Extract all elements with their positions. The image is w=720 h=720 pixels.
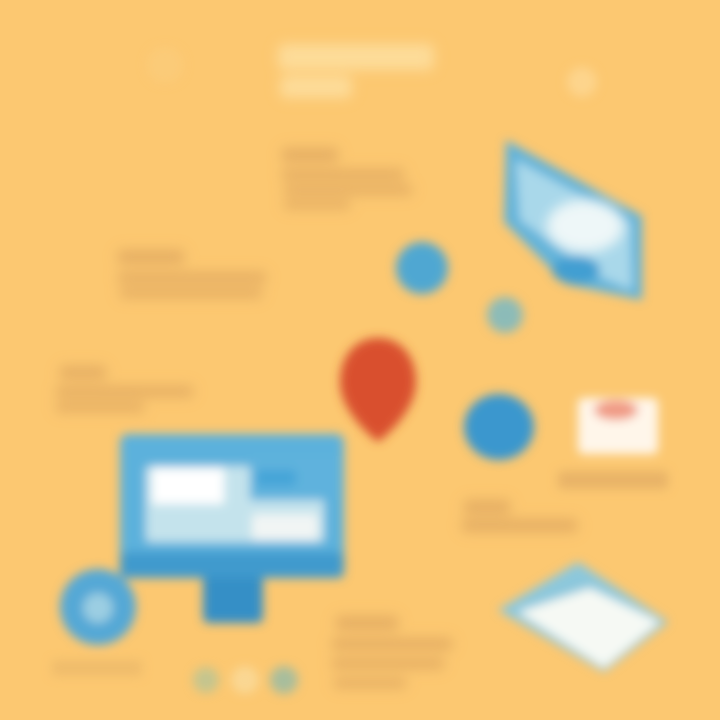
text block: lower centre right (462, 500, 577, 532)
icon: red map pin (340, 338, 416, 442)
text block: under badge (52, 660, 142, 676)
title block (278, 44, 434, 98)
icon: desktop monitor (120, 434, 344, 623)
text block: under envelope (558, 471, 668, 489)
icon: tilted tablet bottom right (498, 562, 668, 672)
icon: top right faint mark (567, 67, 597, 97)
text block: lower left (56, 366, 193, 412)
icon: small teal dot (487, 297, 523, 333)
blurred artwork (52, 44, 668, 694)
icon: blue globe (464, 394, 534, 460)
icons: three small dots (193, 666, 298, 694)
text block: middle left (118, 250, 266, 298)
icon: top left faint mark (147, 47, 183, 83)
text block: upper centre (282, 148, 412, 209)
text block: bottom centre (332, 616, 452, 688)
icon: round badge bottom left (60, 569, 136, 645)
icon: tilted tablet top right (504, 140, 642, 300)
icon: blue dot upper (396, 242, 448, 294)
icon: envelope (578, 398, 658, 454)
